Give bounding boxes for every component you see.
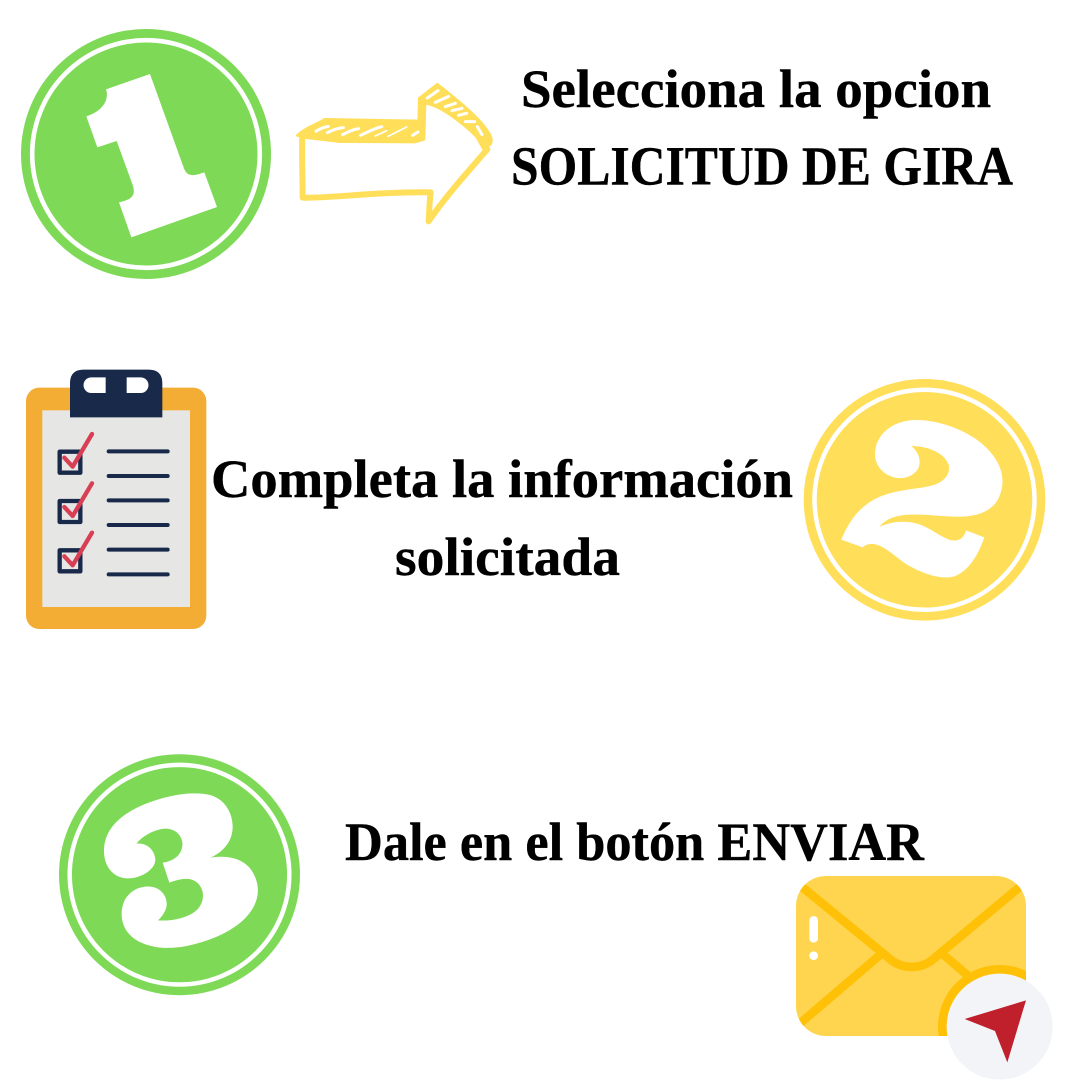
text: step 3 instruction: Dale en el botón ENVIAR — [345, 812, 925, 872]
text: step 1 instruction: SOLICITUD DE GIRA — [511, 136, 1013, 196]
step 3 badge: green circle with number 3 — [59, 754, 300, 995]
check marks — [64, 434, 92, 565]
text: step 2 instruction — [211, 449, 793, 587]
clipboard board — [26, 388, 206, 629]
step 1 badge: green circle with number 1 — [21, 29, 271, 279]
send arrow — [965, 1000, 1026, 1062]
send badge circle — [947, 974, 1053, 1080]
envelope body — [796, 876, 1026, 1036]
checklist lines — [109, 451, 168, 574]
text: step 1 instruction — [511, 59, 1013, 196]
checklist boxes — [60, 452, 80, 571]
clip holes — [84, 377, 148, 393]
step 2 badge: yellow circle with number 2 — [804, 379, 1045, 621]
icon: clipboard checklist — [26, 370, 206, 629]
envelope flap lines — [798, 884, 1026, 1036]
icon: hand-drawn yellow arrow — [297, 84, 491, 221]
paper sheet — [42, 410, 190, 607]
icon: envelope with send badge — [796, 876, 1057, 1080]
clip — [70, 370, 162, 417]
exclamation mark — [809, 916, 818, 960]
text: step 2 instruction: Completa la información — [211, 449, 793, 509]
text: step 1 instruction: Selecciona la opcion — [521, 59, 991, 119]
text: step 2 instruction: solicitada — [395, 527, 620, 587]
